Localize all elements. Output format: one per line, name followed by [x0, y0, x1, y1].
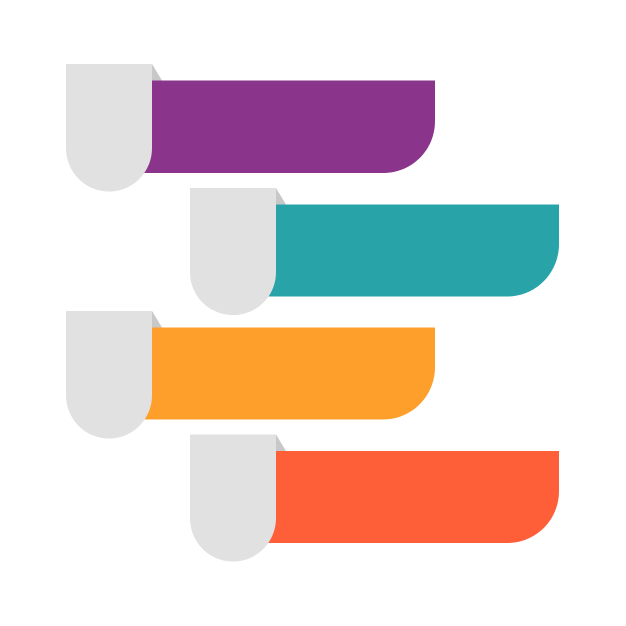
tab fold shadow: [276, 434, 286, 451]
orange bar: [140, 328, 435, 420]
tab fold shadow: [276, 188, 286, 204]
tab fold shadow: [152, 64, 162, 80]
panel: purple banner: [66, 64, 435, 192]
purple bar: [140, 80, 435, 173]
red-orange bar: [264, 451, 559, 543]
grey tab: [190, 434, 276, 562]
tab fold shadow: [152, 311, 162, 328]
grey tab: [190, 188, 276, 315]
panel: orange banner: [66, 311, 435, 438]
panel: teal banner: [190, 188, 559, 315]
grey tab: [66, 64, 152, 192]
teal bar: [264, 204, 559, 296]
grey tab: [66, 311, 152, 438]
panel: red-orange banner: [190, 434, 559, 562]
